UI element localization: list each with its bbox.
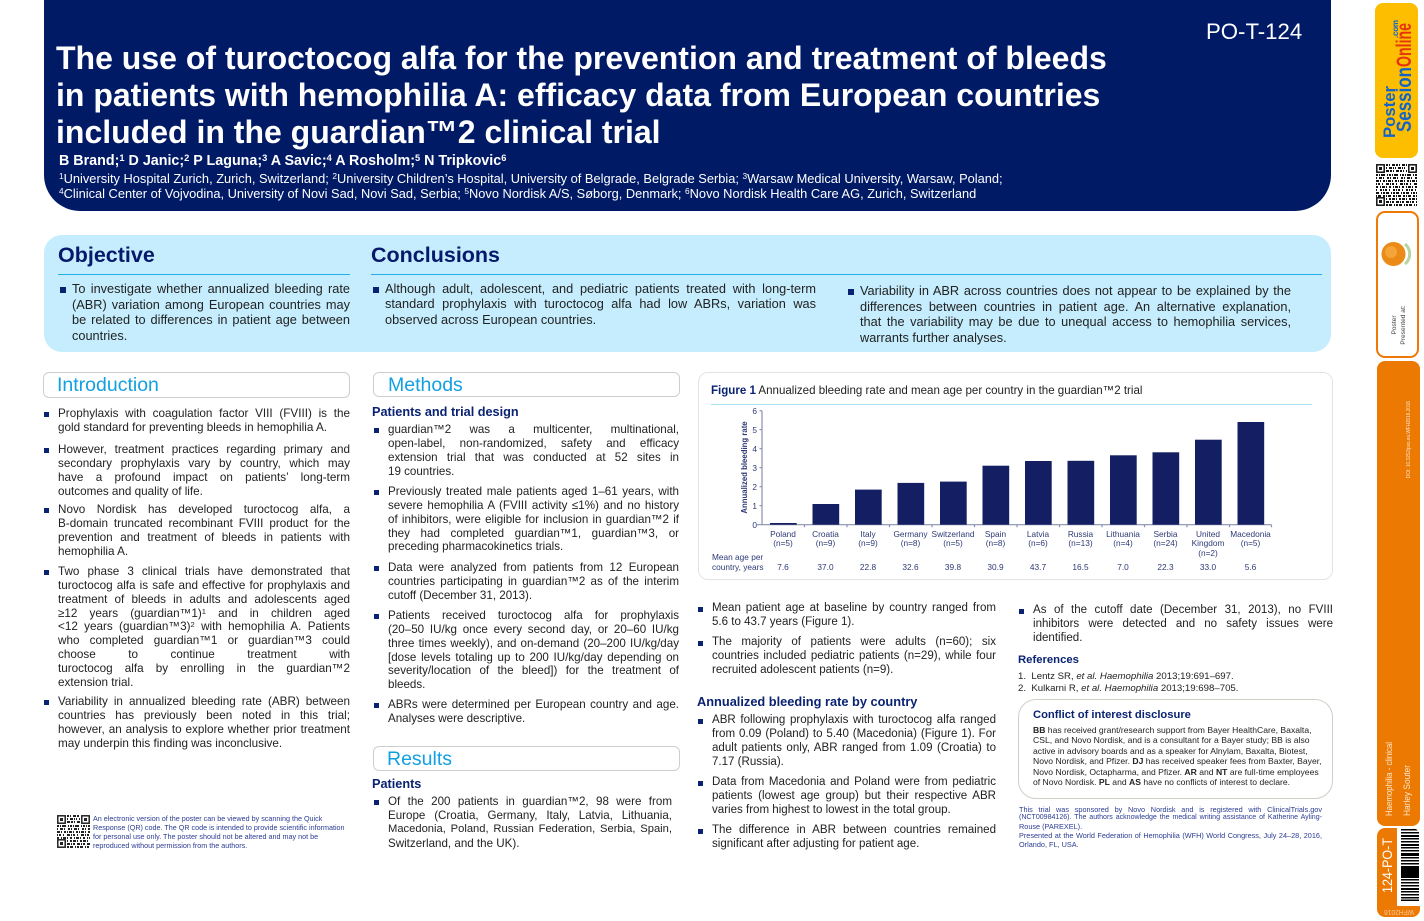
- y axis ticks: 1: [752, 501, 757, 511]
- header banner: [44, 0, 1331, 211]
- presented at label: Presented at:: [1400, 305, 1407, 345]
- demographics bullet 2: recruited adolescent patients (n=9).: [712, 664, 893, 676]
- ABR bullet 2: varies from highest to lowest in the total group.: [712, 804, 951, 816]
- references list: 1. Lentz SR, et al. Haemophilia 2013;19:691–697.: [1018, 670, 1234, 682]
- objective text: (ABR) variation among European countries may: [72, 297, 350, 312]
- sponsor note: Orlando, FL, USA.: [1019, 840, 1079, 848]
- intro bullet 5: [58, 695, 350, 750]
- sponsor note: (NCT00984126). The authors acknowledge the medical writing assistance of Katherine Ayling-: [1019, 814, 1322, 821]
- heading: conclusions: Conclusions: [371, 243, 500, 267]
- title: [56, 40, 1107, 150]
- country labels: Croatia: [812, 529, 839, 539]
- demographics bullet 2: The majority of patients were adults (n=60); six: [712, 636, 996, 648]
- methods bullet 3: countries participating in guardian™2 as of the interim: [388, 575, 679, 588]
- intro bullet 2: [58, 443, 350, 498]
- intro bullet 5: countries has previously been noted in this trial;: [58, 709, 350, 722]
- intro bullet 2: secondary prophylaxis vary by country, which may: [58, 457, 350, 470]
- objective text: countries.: [72, 328, 127, 343]
- country labels: (n=24): [1153, 538, 1178, 548]
- conclusion one: standard prophylaxis with turoctocog alfa had low ABRs, variation was: [385, 296, 816, 311]
- methods bullet 4: [dose levels totaling up to 200 IU/kg/day depending on: [388, 651, 679, 664]
- results bullet 1: Europe (Croatia, Germany, Italy, Latvia, Lithuania,: [388, 809, 672, 822]
- country labels: (n=2): [1198, 548, 1218, 558]
- country labels: Macedonia: [1230, 529, 1271, 539]
- conclusion one: observed across European countries.: [385, 312, 596, 327]
- methods bullet 4: Patients received turoctocog alfa for prophylaxis: [388, 609, 679, 622]
- results bullet 1: [388, 795, 672, 850]
- mean age row: 43.7: [1030, 562, 1046, 572]
- presented at label: Poster: [1391, 315, 1398, 335]
- panel: objective and conclusions: [44, 235, 1331, 352]
- intro bullet 4: Two phase 3 clinical trials have demonstrated that: [58, 565, 350, 578]
- y axis ticks: 4: [752, 444, 757, 454]
- QR code note: reproduced without permission from the authors.: [93, 840, 247, 850]
- mean age row: 22.8: [860, 562, 876, 572]
- conflict heading: Conflict of interest disclosure: [1033, 708, 1191, 720]
- title: in patients with hemophilia A: efficacy data from European countries: [56, 76, 1100, 112]
- mean age row: 30.9: [987, 562, 1004, 572]
- ABR bullet 3: [712, 824, 996, 852]
- QR code note: for personal use only. The poster should not be altered and may not be: [93, 832, 318, 840]
- country labels: Latvia: [1027, 529, 1049, 539]
- section heading: methods: [373, 372, 680, 397]
- country labels: (n=6): [1028, 538, 1048, 548]
- demographics bullet 2: countries included pediatric patients (n=29), while four: [712, 650, 996, 662]
- results bullet 1: Switzerland, and the UK).: [388, 837, 519, 850]
- methods bullet 1: [388, 423, 679, 478]
- methods bullet 4: bleeds.: [388, 678, 425, 691]
- figure title: Figure 1 Annualized bleeding rate and mean age per country in the guardian™2 trial: [711, 385, 1142, 397]
- ABR bullet 1: from 0.09 (Poland) to 5.40 (Macedonia) (Figure 1). For: [712, 728, 996, 740]
- ABR bullet 1: [712, 714, 996, 769]
- poster code: 124-PO-T: [1380, 838, 1395, 893]
- intro bullet 3: hemophilia A.: [58, 545, 128, 558]
- ABR bullet 2: [712, 776, 996, 818]
- country labels: Spain: [985, 529, 1006, 539]
- mean age row: [712, 552, 1257, 572]
- sidebar: PosterSessionOnline logo: Session: [1393, 67, 1416, 132]
- country labels: Kingdom: [1192, 538, 1224, 548]
- sidebar: presented at box: [1376, 211, 1419, 358]
- methods bullet 4: three times weekly), and on-demand (20–200 IU/kg/day: [388, 637, 679, 650]
- safety bullet: [1033, 604, 1333, 646]
- intro bullet 4: treatment of bleeds in adults and adolescents aged: [58, 593, 350, 606]
- intro bullet 3: prevention and treatment of bleeds in patients with: [58, 531, 350, 544]
- methods bullet 3: [388, 561, 679, 603]
- section heading: introduction: Introduction: [57, 374, 159, 396]
- poster number: PO-T-124: [1206, 19, 1302, 44]
- demographics bullet 2: [712, 636, 996, 678]
- demographics bullet 1: 5.6 to 43.7 years (Figure 1).: [712, 616, 854, 628]
- panel: figure 1: [698, 372, 1333, 580]
- sidebar: PosterSessionOnline logo: .com: [1391, 20, 1400, 38]
- mean age row: 7.6: [777, 562, 789, 572]
- title: The use of turoctocog alfa for the prevention and treatment of bleeds: [56, 40, 1107, 76]
- intro bullet 4: turoctocog alfa by enrolling in the guardian™2: [58, 662, 350, 675]
- conflict text: BB has received grant/research support from Bayer HealthCare, Baxalta,: [1033, 725, 1311, 735]
- QR code note: An electronic version of the poster can be viewed by scanning the Quick: [93, 814, 322, 822]
- intro bullet 5: however, an analysis to explore whether prior treatment: [58, 723, 350, 736]
- objective text: To investigate whether annualized bleeding rate: [72, 281, 350, 296]
- methods bullet 4: (20–50 IU/kg once every second day, or 20–60 IU/kg: [388, 623, 679, 636]
- methods bullet 1: open-label, non-randomized, safety and efficacy: [388, 437, 679, 450]
- conclusion two: differences between countries in patient age. An alternative explanation,: [860, 299, 1291, 314]
- mean age row: Mean age per: [712, 552, 763, 562]
- mean age row: 37.0: [817, 562, 834, 572]
- ABR bullet 1: 7.17 (Russia).: [712, 756, 784, 768]
- country labels: Switzerland: [932, 529, 975, 539]
- section heading: results: Results: [387, 748, 452, 770]
- intro bullet 4: choose to continue treatment with: [58, 648, 350, 661]
- intro bullet 4: who completed guardian™1 or guardian™3 could: [58, 634, 350, 647]
- safety bullet: As of the cutoff date (December 31, 2013), no FVIII: [1033, 604, 1333, 616]
- country labels: Serbia: [1154, 529, 1178, 539]
- DOI text: DOI: 10.3252/pso.eu.WFH2016.2016: [1406, 401, 1412, 478]
- methods bullet 1: extension trial that was conducted at 52 sites in: [388, 451, 679, 464]
- sidebar: PosterSessionOnline logo: Online: [1393, 23, 1416, 67]
- conflict text: Novo Nordisk, Octapharma, and Pfizer. AR and NT are full-time employees: [1033, 767, 1319, 777]
- objective text: [72, 281, 350, 344]
- conclusions rule: [371, 274, 1322, 275]
- intro bullet 2: have a profound impact on patients’ long-term: [58, 471, 350, 484]
- objective text: be related to differences in patient age between: [72, 312, 350, 327]
- presented at label: [1391, 305, 1407, 345]
- intro bullet 4: ≥12 years (guardian™1)1 and in children aged: [58, 606, 350, 620]
- references list: 2. Kulkarni R, et al. Haemophilia 2013;19:698–705.: [1018, 682, 1238, 694]
- mean age row: 32.6: [902, 562, 919, 572]
- heading: objective: Objective: [58, 243, 155, 267]
- intro bullet 1: [58, 407, 350, 435]
- safety bullet: inhibitors were detected and no safety issues were: [1033, 618, 1333, 630]
- conclusion two: that the variability may be due to unequal access to hemophilia services,: [860, 314, 1291, 329]
- intro bullet 4: turoctocog alfa is safe and effective for prophylaxis and: [58, 579, 350, 592]
- country labels: (n=4): [1113, 538, 1133, 548]
- demographics bullet 1: Mean patient age at baseline by country ranged from: [712, 602, 996, 614]
- ABR bullet 3: significant after adjusting for patient age.: [712, 838, 919, 850]
- mean age row: 7.0: [1117, 562, 1129, 572]
- mean age row: 22.3: [1157, 562, 1174, 572]
- mean age row: 16.5: [1072, 562, 1089, 572]
- y axis ticks: [752, 406, 757, 530]
- event code: WFH2016: [1384, 908, 1414, 915]
- topic label: Haemophilia - clinical: [1384, 742, 1394, 816]
- intro bullet 3: [58, 503, 350, 558]
- country labels: (n=5): [1241, 538, 1261, 548]
- intro bullet 5: may underpin this finding was inconclusive.: [58, 737, 282, 750]
- affiliations: [59, 170, 1003, 200]
- ABR bullet 2: Data from Macedonia and Poland were from pediatric: [712, 776, 996, 788]
- conclusion two: [860, 283, 1291, 346]
- methods bullet 5: [388, 698, 679, 726]
- methods bullet 4: [388, 609, 679, 692]
- methods bullet 5: Analyses were descriptive.: [388, 712, 525, 725]
- ABR bullet 1: adult patients only, ABR ranged from 1.09 (Croatia) to: [712, 742, 996, 754]
- affiliations: 4Clinical Center of Vojvodina, University of Novi Sad, Novi Sad, Serbia; 5Novo Nordisk A/S, Søborg, Denmark; 6Novo Nordisk Health Care AG, Zurich, Switzerland: [59, 186, 976, 200]
- figure rule: [711, 404, 1312, 405]
- conclusion one: [385, 280, 816, 328]
- title: included in the guardian™2 clinical trial: [56, 114, 661, 150]
- ABR bullet 1: ABR following prophylaxis with turoctocog alfa ranged: [712, 714, 996, 726]
- sidebar: barcode tab: [1377, 828, 1420, 917]
- bars: [770, 422, 1264, 525]
- methods bullet 1: 19 countries.: [388, 465, 454, 478]
- sponsor note: [1019, 804, 1322, 848]
- ABR bullet 3: The difference in ABR between countries remained: [712, 824, 996, 836]
- methods bullet 2: severe hemophilia A (FVIII activity ≤1%) and no history: [388, 499, 679, 512]
- country labels: [770, 529, 1271, 558]
- y axis ticks: 3: [752, 463, 757, 473]
- QR code note: [93, 814, 345, 850]
- country labels: (n=9): [858, 538, 878, 548]
- conflict text: [1033, 725, 1322, 787]
- results bullet 1: Of the 200 patients in guardian™2, 98 were from: [388, 795, 672, 808]
- panel: conflict of interest: [1018, 699, 1333, 799]
- intro bullet 3: B-domain truncated recombinant FVIII product for the: [58, 517, 350, 530]
- results bullet 1: Macedonia, Poland, Russian Federation, Serbia, Spain,: [388, 823, 672, 835]
- subheading: patients: Patients: [372, 777, 421, 791]
- sponsor note: Presented at the World Federation of Hemophilia (WFH) World Congress, July 24–28, 2016,: [1019, 831, 1322, 840]
- intro bullet 1: Prophylaxis with coagulation factor VIII (FVIII) is the: [58, 407, 350, 420]
- authors: B Brand;1 D Janic;2 P Laguna;3 A Savic;4 A Rosholm;5 N Tripkovic6: [59, 153, 506, 169]
- objective rule: [58, 274, 350, 275]
- safety bullet: identified.: [1033, 632, 1082, 644]
- icon: congress logo: [1382, 242, 1410, 266]
- intro bullet 2: outcomes and quality of life.: [58, 485, 203, 498]
- country labels: (n=9): [816, 538, 836, 548]
- intro bullet 3: Novo Nordisk has developed turoctocog alfa, a: [58, 503, 350, 516]
- author label: Harley Souter: [1402, 765, 1412, 816]
- intro bullet 4: <12 years (guardian™3)2 with hemophilia A. Patients: [58, 620, 350, 633]
- methods bullet 4: severity/location of the bleed]) for the treatment of: [388, 664, 679, 677]
- country labels: Italy: [860, 529, 876, 539]
- QR code: electronic poster: [57, 815, 90, 848]
- conclusion two: warrants further analyses.: [860, 330, 1007, 345]
- sidebar: PosterSessionOnline logo: [1375, 3, 1418, 158]
- methods bullet 2: of inhibitors, were eligible for inclusion in guardian™2 if: [388, 513, 679, 526]
- sidebar: orange topic panel: [1377, 361, 1420, 826]
- intro bullet 5: Variability in annualized bleeding rate (ABR) between: [58, 695, 350, 708]
- methods bullet 3: cutoff (December 31, 2013).: [388, 589, 532, 602]
- icon: barcode: [1401, 829, 1419, 901]
- demographics bullet 1: [712, 602, 996, 630]
- ABR bullet 2: patients (lowest age group) but their respective ABR: [712, 790, 996, 802]
- section heading: results: [373, 746, 680, 771]
- country labels: Russia: [1068, 529, 1094, 539]
- QR code note: Response (QR) code. The QR code is intended to provide scientific information: [93, 822, 345, 832]
- y axis ticks: 0: [752, 520, 757, 530]
- sidebar: PosterSessionOnline logo: Poster: [1380, 86, 1399, 138]
- references list: [1018, 670, 1238, 694]
- sidebar: QR code: [1376, 164, 1417, 206]
- intro bullet 4: extension trial.: [58, 676, 133, 689]
- methods bullet 3: Data were analyzed from patients from 12 European: [388, 561, 679, 574]
- conclusion two: Variability in ABR across countries does not appear to be explained by the: [860, 283, 1291, 298]
- sponsor note: Rouse (PAREXEL).: [1019, 822, 1082, 831]
- subheading: patients and trial design: Patients and trial design: [372, 405, 519, 419]
- bar chart: [712, 406, 1272, 572]
- mean age row: 39.8: [945, 562, 961, 572]
- y axis ticks: 6: [752, 406, 757, 416]
- country labels: (n=8): [986, 538, 1006, 548]
- affiliations: 1University Hospital Zurich, Zurich, Switzerland; 2University Children’s Hospital, University of Belgrade, Belgrade Serbia; 3Warsaw Medical University, Warsaw, Poland;: [59, 170, 1003, 186]
- conflict text: of Novo Nordisk. PL and AS have no conflicts of interest to declare.: [1033, 777, 1290, 787]
- intro bullet 4: [58, 565, 350, 690]
- intro bullet 1: gold standard for preventing bleeds in hemophilia A.: [58, 421, 327, 434]
- intro bullet 2: However, treatment practices regarding primary and: [58, 443, 350, 456]
- country labels: Lithuania: [1106, 529, 1140, 539]
- methods bullet 2: Previously treated male patients aged 1–61 years, with: [388, 485, 679, 498]
- country labels: United: [1196, 529, 1220, 539]
- conflict text: Novo Nordisk, and Pfizer. DJ has received speaker fees from Baxter, Bayer,: [1033, 756, 1322, 766]
- y axis ticks: 2: [752, 482, 757, 492]
- mean age row: 33.0: [1200, 562, 1216, 572]
- y axis title: Annualized bleeding rate: [740, 421, 749, 514]
- country labels: (n=13): [1068, 538, 1093, 548]
- methods bullet 5: ABRs were determined per European country and age.: [388, 698, 679, 711]
- methods bullet 2: preceding pharmacokinetics trials.: [388, 540, 563, 553]
- conflict text: active in advisory boards and as a speaker for Alnylam, Baxalta, Biotest,: [1033, 746, 1308, 756]
- country labels: (n=8): [901, 538, 921, 548]
- country labels: (n=5): [943, 538, 963, 548]
- section heading: methods: Methods: [388, 374, 463, 396]
- methods bullet 1: guardian™2 was a multicenter, multinational,: [388, 423, 679, 436]
- y axis ticks: 5: [752, 425, 757, 435]
- sponsor note: This trial was sponsored by Novo Nordisk and is registered with ClinicalTrials.gov: [1019, 804, 1322, 814]
- mean age row: country, years: [712, 562, 764, 572]
- axes: [757, 411, 1272, 527]
- mean age row: 5.6: [1245, 562, 1257, 572]
- subheading: annualized bleeding rate by country: Annualized bleeding rate by country: [697, 694, 917, 709]
- section heading: introduction: [43, 372, 350, 398]
- country labels: Poland: [770, 529, 796, 539]
- country labels: (n=5): [773, 538, 793, 548]
- conclusion one: Although adult, adolescent, and pediatric patients treated with long-term: [385, 280, 816, 296]
- methods bullet 2: [388, 485, 679, 554]
- methods bullet 2: they had completed guardian™1, guardian™3, or: [388, 527, 679, 540]
- subheading: references: References: [1018, 654, 1079, 666]
- country labels: Germany: [893, 529, 928, 539]
- conflict text: CSL, and Novo Nordisk, and is a consultant for a Bayer study; BB is also: [1033, 735, 1310, 745]
